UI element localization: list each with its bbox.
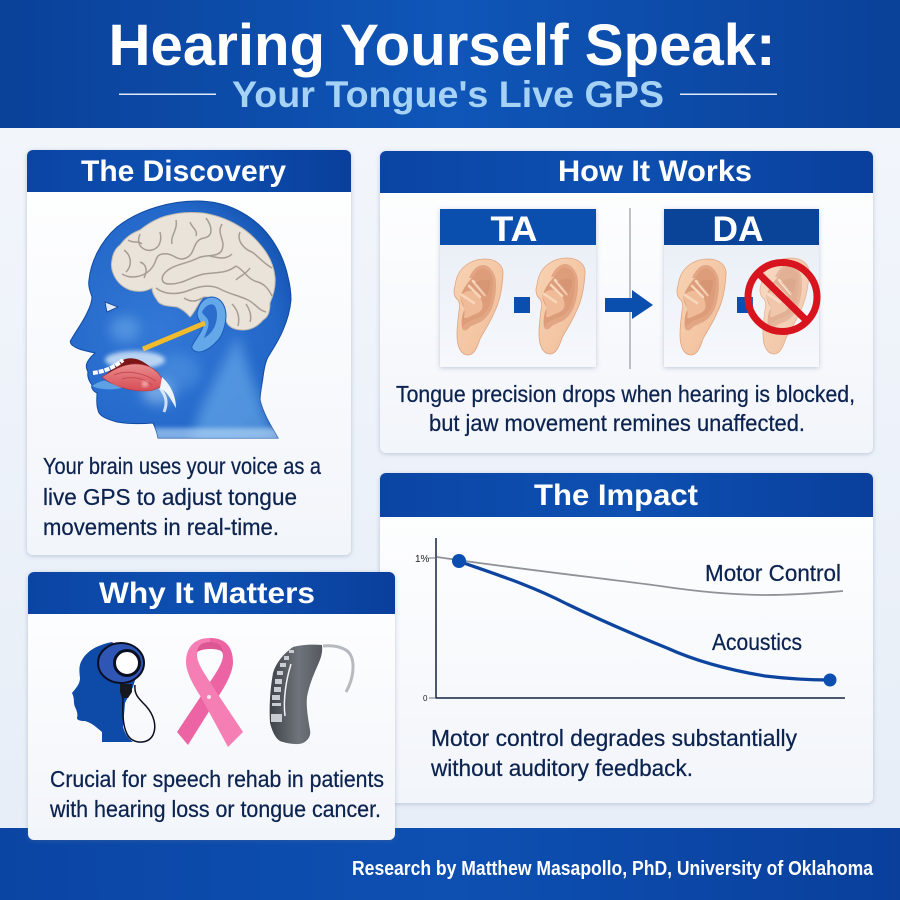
tile: DA condition: DA: [712, 210, 764, 249]
icon: square separator: [514, 297, 530, 313]
series: acoustics: Acoustics: [712, 629, 802, 655]
icon: pink ribbon: [177, 638, 243, 747]
series: acoustics: [452, 554, 836, 686]
mouth and tongue: [92, 351, 176, 412]
ear: [192, 297, 226, 352]
yellow sound path: [143, 323, 205, 349]
arrow: [605, 290, 653, 319]
heading: the discovery: The Discovery: [81, 155, 286, 188]
heading: why it matters: Why It Matters: [99, 577, 315, 610]
brain: [111, 212, 275, 330]
panel: the impact: [380, 473, 873, 803]
line chart: [415, 538, 845, 703]
panel: why it matters: [28, 572, 395, 840]
icon: square separator: [737, 297, 753, 313]
text: discovery description: live GPS to adjust tongue: [43, 484, 297, 510]
icon: left ear: [454, 259, 503, 355]
text: how it works description: Tongue precision drops when hearing is blocked,: [396, 381, 855, 407]
series: motor control: Motor Control: [705, 560, 841, 586]
header banner: [0, 0, 900, 128]
divider: [630, 208, 631, 369]
panel: how it works: [380, 151, 873, 453]
text: why it matters description: [49, 766, 384, 822]
tile: TA condition: [440, 209, 596, 367]
illustration: head with brain, ear and tongue: [70, 201, 291, 445]
panel: the discovery: [27, 150, 351, 555]
icon: blocked ear: [748, 258, 817, 354]
series: motor control: [437, 557, 843, 595]
text: why it matters description: with hearing loss or tongue cancer.: [49, 796, 381, 822]
tile: TA condition: TA: [490, 210, 538, 249]
heading: the impact: The Impact: [534, 479, 698, 512]
icon: left ear: [677, 259, 726, 355]
text: impact description: [430, 725, 797, 781]
heading: how it works: How It Works: [558, 155, 752, 188]
icon: right ear: [536, 258, 585, 354]
eye: [105, 302, 118, 312]
tile: DA condition: [664, 209, 819, 367]
line chart: 0: [423, 694, 428, 703]
line chart: 1%: [415, 554, 430, 565]
footer band: [0, 828, 900, 900]
text: how it works description: [396, 381, 855, 436]
text: why it matters description: Crucial for speech rehab in patients: [50, 766, 384, 792]
text: impact description: Motor control degrades substantially: [431, 725, 797, 751]
subtitle: Your Tongue's Live GPS: [232, 74, 664, 115]
title: Hearing Yourself Speak:: [108, 13, 776, 78]
icon: cochlear implant: [72, 642, 155, 742]
text: how it works description: but jaw movement remines unaffected.: [429, 410, 805, 436]
text: discovery description: Your brain uses your voice as a: [43, 453, 321, 479]
text: discovery description: movements in real-time.: [43, 514, 279, 540]
icon: hearing aid: [270, 645, 353, 744]
text: discovery description: [43, 453, 321, 540]
text: impact description: without auditory feedback.: [430, 755, 693, 781]
